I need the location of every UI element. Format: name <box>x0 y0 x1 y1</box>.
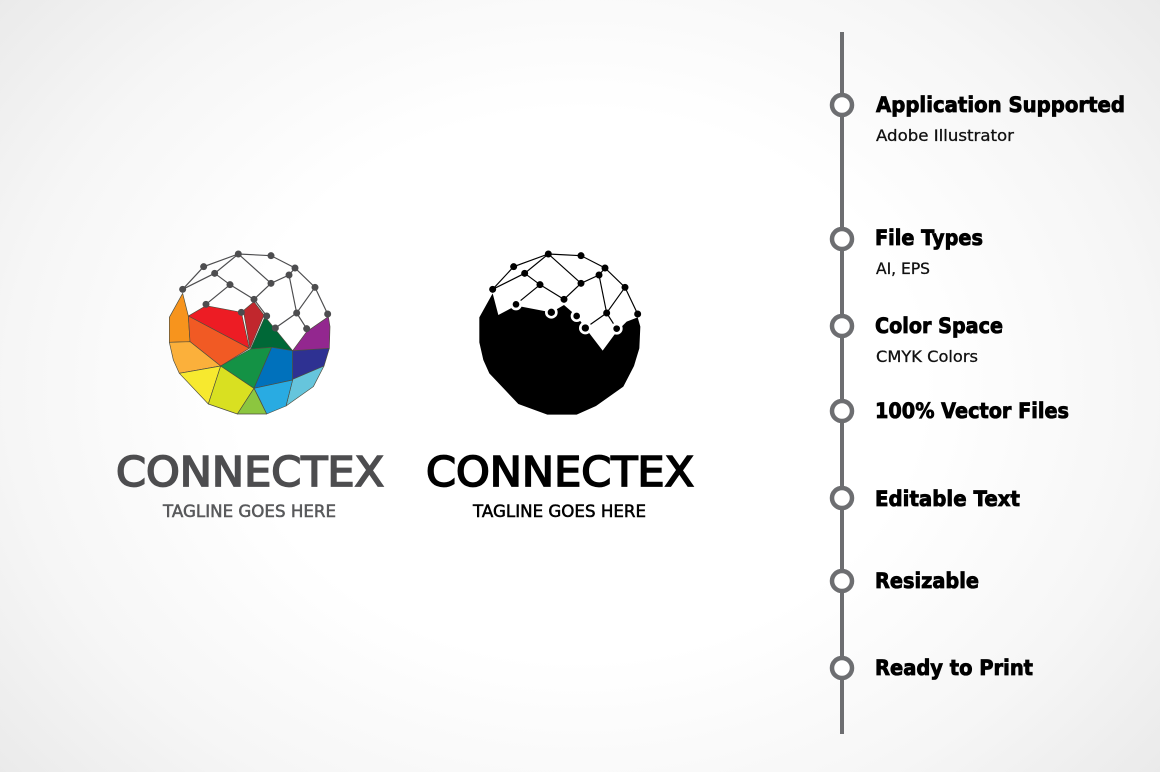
feature: resizable: Resizable <box>875 569 979 594</box>
wireframe lines: black logo <box>493 254 638 329</box>
feature: file types <box>875 226 983 278</box>
black logo tagline: TAGLINE GOES HERE <box>472 502 646 522</box>
feature: application supported: Adobe Illustrator <box>876 126 1014 145</box>
colour logo tagline: TAGLINE GOES HERE <box>162 502 336 522</box>
feature: editable text: Editable Text <box>875 487 1020 512</box>
timeline spine <box>840 32 844 734</box>
black logo mark <box>479 250 641 415</box>
feature: color space: CMYK Colors <box>876 347 978 366</box>
feature: vector files: 100% Vector Files <box>875 399 1069 424</box>
feature timeline <box>832 32 852 734</box>
feature: file types: File Types <box>875 226 983 251</box>
network nodes: colour logo <box>179 250 331 332</box>
feature: ready to print: Ready to Print <box>875 656 1033 681</box>
feature: color space: Color Space <box>875 314 1003 339</box>
wireframe lines: colour logo <box>183 254 328 329</box>
network nodes: black logo <box>489 250 641 333</box>
black logo wordmark: CONNECTEX <box>426 448 694 496</box>
feature: color space <box>875 314 1003 366</box>
solid black shape <box>479 293 640 415</box>
feature: application supported <box>876 93 1125 145</box>
colour facets <box>169 293 330 414</box>
colour logo wordmark: CONNECTEX <box>116 448 384 496</box>
feature: application supported: Application Supported <box>876 93 1125 118</box>
colour logo mark <box>169 250 331 414</box>
feature: file types: AI, EPS <box>876 259 930 278</box>
timeline nodes <box>832 95 852 678</box>
